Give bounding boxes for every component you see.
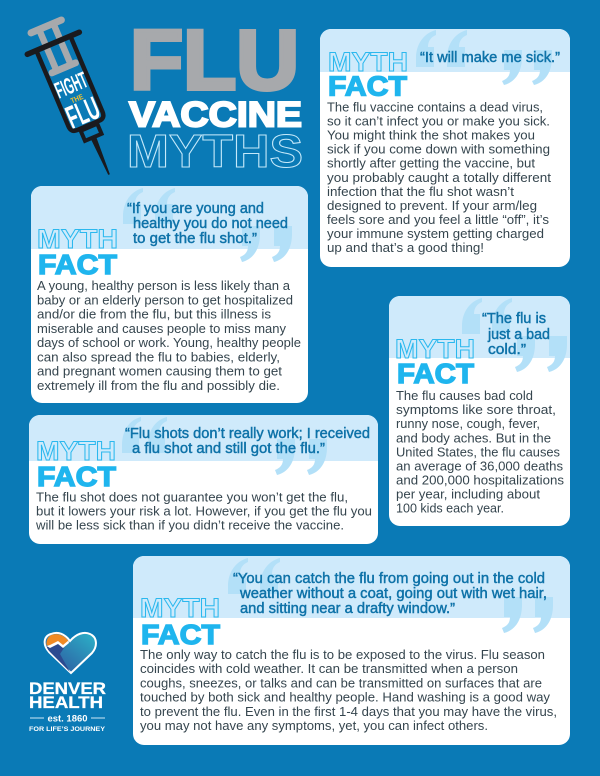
myth quote: “It will make me sick.” — [420, 50, 560, 66]
myth label: MYTH — [395, 334, 475, 364]
fact text: feels sore and you feel a little “off”, it’s — [327, 212, 549, 227]
fact text: and 200,000 hospitalizations — [396, 473, 564, 488]
fact label: FACT — [141, 619, 220, 650]
myth quote: healthy you do not need — [133, 216, 288, 232]
fact text: so it can’t infect you or make you sick. — [327, 114, 550, 129]
myth quote: to get the flu shot.” — [133, 231, 257, 247]
logo: denver health — [29, 633, 106, 733]
fact text: infection that the flu shot wasn’t — [327, 184, 514, 199]
fact text: but it lowers your risk a lot. However, if you get the flu you — [36, 504, 372, 518]
fact label: FACT — [37, 461, 116, 492]
panel: it will make me sick — [320, 29, 570, 267]
fact text — [327, 100, 551, 255]
title: FLU — [130, 13, 299, 107]
logo: denver health: DENVER — [29, 680, 106, 698]
fact text: your immune system getting charged — [327, 226, 544, 241]
icon: fight the flu syringe: FIGHT — [51, 66, 91, 103]
myth quote: “Flu shots don’t really work; I received — [125, 426, 370, 442]
fact text: The flu vaccine contains a dead virus, — [327, 100, 543, 114]
myth quote: “If you are young and — [127, 201, 264, 217]
myth quote: weather without a coat, going out with wet hair, — [239, 586, 547, 602]
fact text: miserable and causes people to miss many — [37, 321, 287, 336]
fact text: A young, healthy person is less likely than a — [37, 278, 291, 293]
fact text: coughs, sneezes, or talks and can be transmitted on surfaces that are — [140, 675, 542, 690]
fact label: FACT — [328, 70, 407, 102]
myth quote: and sitting near a drafty window.” — [240, 601, 455, 617]
myth quote — [482, 311, 550, 358]
myth quote: just a bad — [487, 327, 550, 343]
fact text: can also spread the flu to babies, elderly, — [37, 349, 280, 364]
fact text — [396, 388, 564, 516]
myth label: MYTH — [37, 224, 118, 254]
title: MYTHS — [127, 125, 303, 177]
fact label: FACT — [397, 358, 474, 389]
fact text: shortly after getting the vaccine, but — [327, 156, 535, 171]
myth quote — [233, 571, 547, 617]
fact text: sick if you come down with something — [327, 142, 550, 157]
fact text: will be less sick than if you didn’t receive the vaccine. — [35, 518, 344, 532]
myth quote: “You can catch the flu from going out in the cold — [233, 571, 545, 587]
fact text: an average of 36,000 deaths — [396, 458, 563, 474]
myth quote — [127, 201, 288, 247]
fact text: The flu causes bad cold — [396, 388, 533, 403]
panel: cold weather — [133, 556, 570, 745]
panel: just a bad cold — [389, 296, 570, 526]
myth quote: cold.” — [488, 342, 526, 358]
fact label: FACT — [38, 249, 117, 280]
title: VACCINE — [129, 96, 302, 134]
myth label: MYTH — [140, 593, 220, 623]
icon: fight the flu syringe: FLU — [61, 90, 105, 136]
title — [127, 13, 303, 177]
fact text: and body aches. But in the — [396, 430, 551, 445]
fact text: 100 kids each year. — [396, 501, 504, 516]
fact text: days of school or work. Young, healthy people — [37, 335, 301, 350]
myth label: MYTH — [328, 47, 408, 77]
logo: denver health: FOR LIFE’S JOURNEY — [29, 726, 105, 733]
fact text: to prevent the flu. Even in the first 1-4 days that you may have the virus, — [140, 704, 557, 719]
fact text: and pregnant women causing them to get — [37, 364, 282, 379]
icon: fight the flu syringe — [16, 11, 137, 186]
panel: young and healthy — [31, 186, 308, 403]
logo: denver health: HEALTH — [29, 694, 103, 712]
fact text: The flu shot does not guarantee you won’t get the flu, — [36, 490, 348, 504]
fact text: extremely ill from the flu and possibly die. — [37, 378, 280, 393]
fact text: runny nose, cough, fever, — [396, 416, 540, 431]
fact text: United States, the flu causes — [396, 444, 560, 459]
icon: fight the flu syringe: THE — [69, 92, 85, 105]
fact text: The only way to catch the flu is to be exposed to the virus. Flu season — [140, 647, 545, 662]
fact text — [37, 278, 301, 393]
fact text: you probably caught a totally different — [327, 170, 551, 185]
fact text: designed to prevent. If your arm/leg — [327, 198, 537, 213]
panel: flu shots don't work — [29, 415, 378, 544]
fact text: symptoms like sore throat, — [396, 402, 556, 417]
logo: denver health: est. 1860 — [48, 714, 88, 724]
fact text — [140, 647, 557, 733]
myth label: MYTH — [36, 436, 116, 466]
myth quote: “The flu is — [482, 311, 546, 327]
fact text: You might think the shot makes you — [327, 128, 535, 143]
fact text: you may not have any symptoms, yet, you can infect others. — [140, 718, 488, 733]
fact text: and/or die from the flu, but this illness is — [37, 307, 271, 322]
fact text: baby or an elderly person to get hospitalized — [37, 292, 293, 307]
icon: heart — [45, 633, 96, 673]
fact text: up and that’s a good thing! — [327, 240, 484, 255]
fact text — [35, 490, 372, 532]
myth quote: a flu shot and still got the flu.” — [132, 441, 325, 457]
myth quote — [125, 426, 370, 457]
fact text: touched by both sick and healthy people. Hand washing is a good way — [140, 690, 551, 705]
fact text: coincides with cold weather. It can be transmitted when a person — [140, 661, 518, 676]
fact text: per year, including about — [396, 487, 540, 502]
